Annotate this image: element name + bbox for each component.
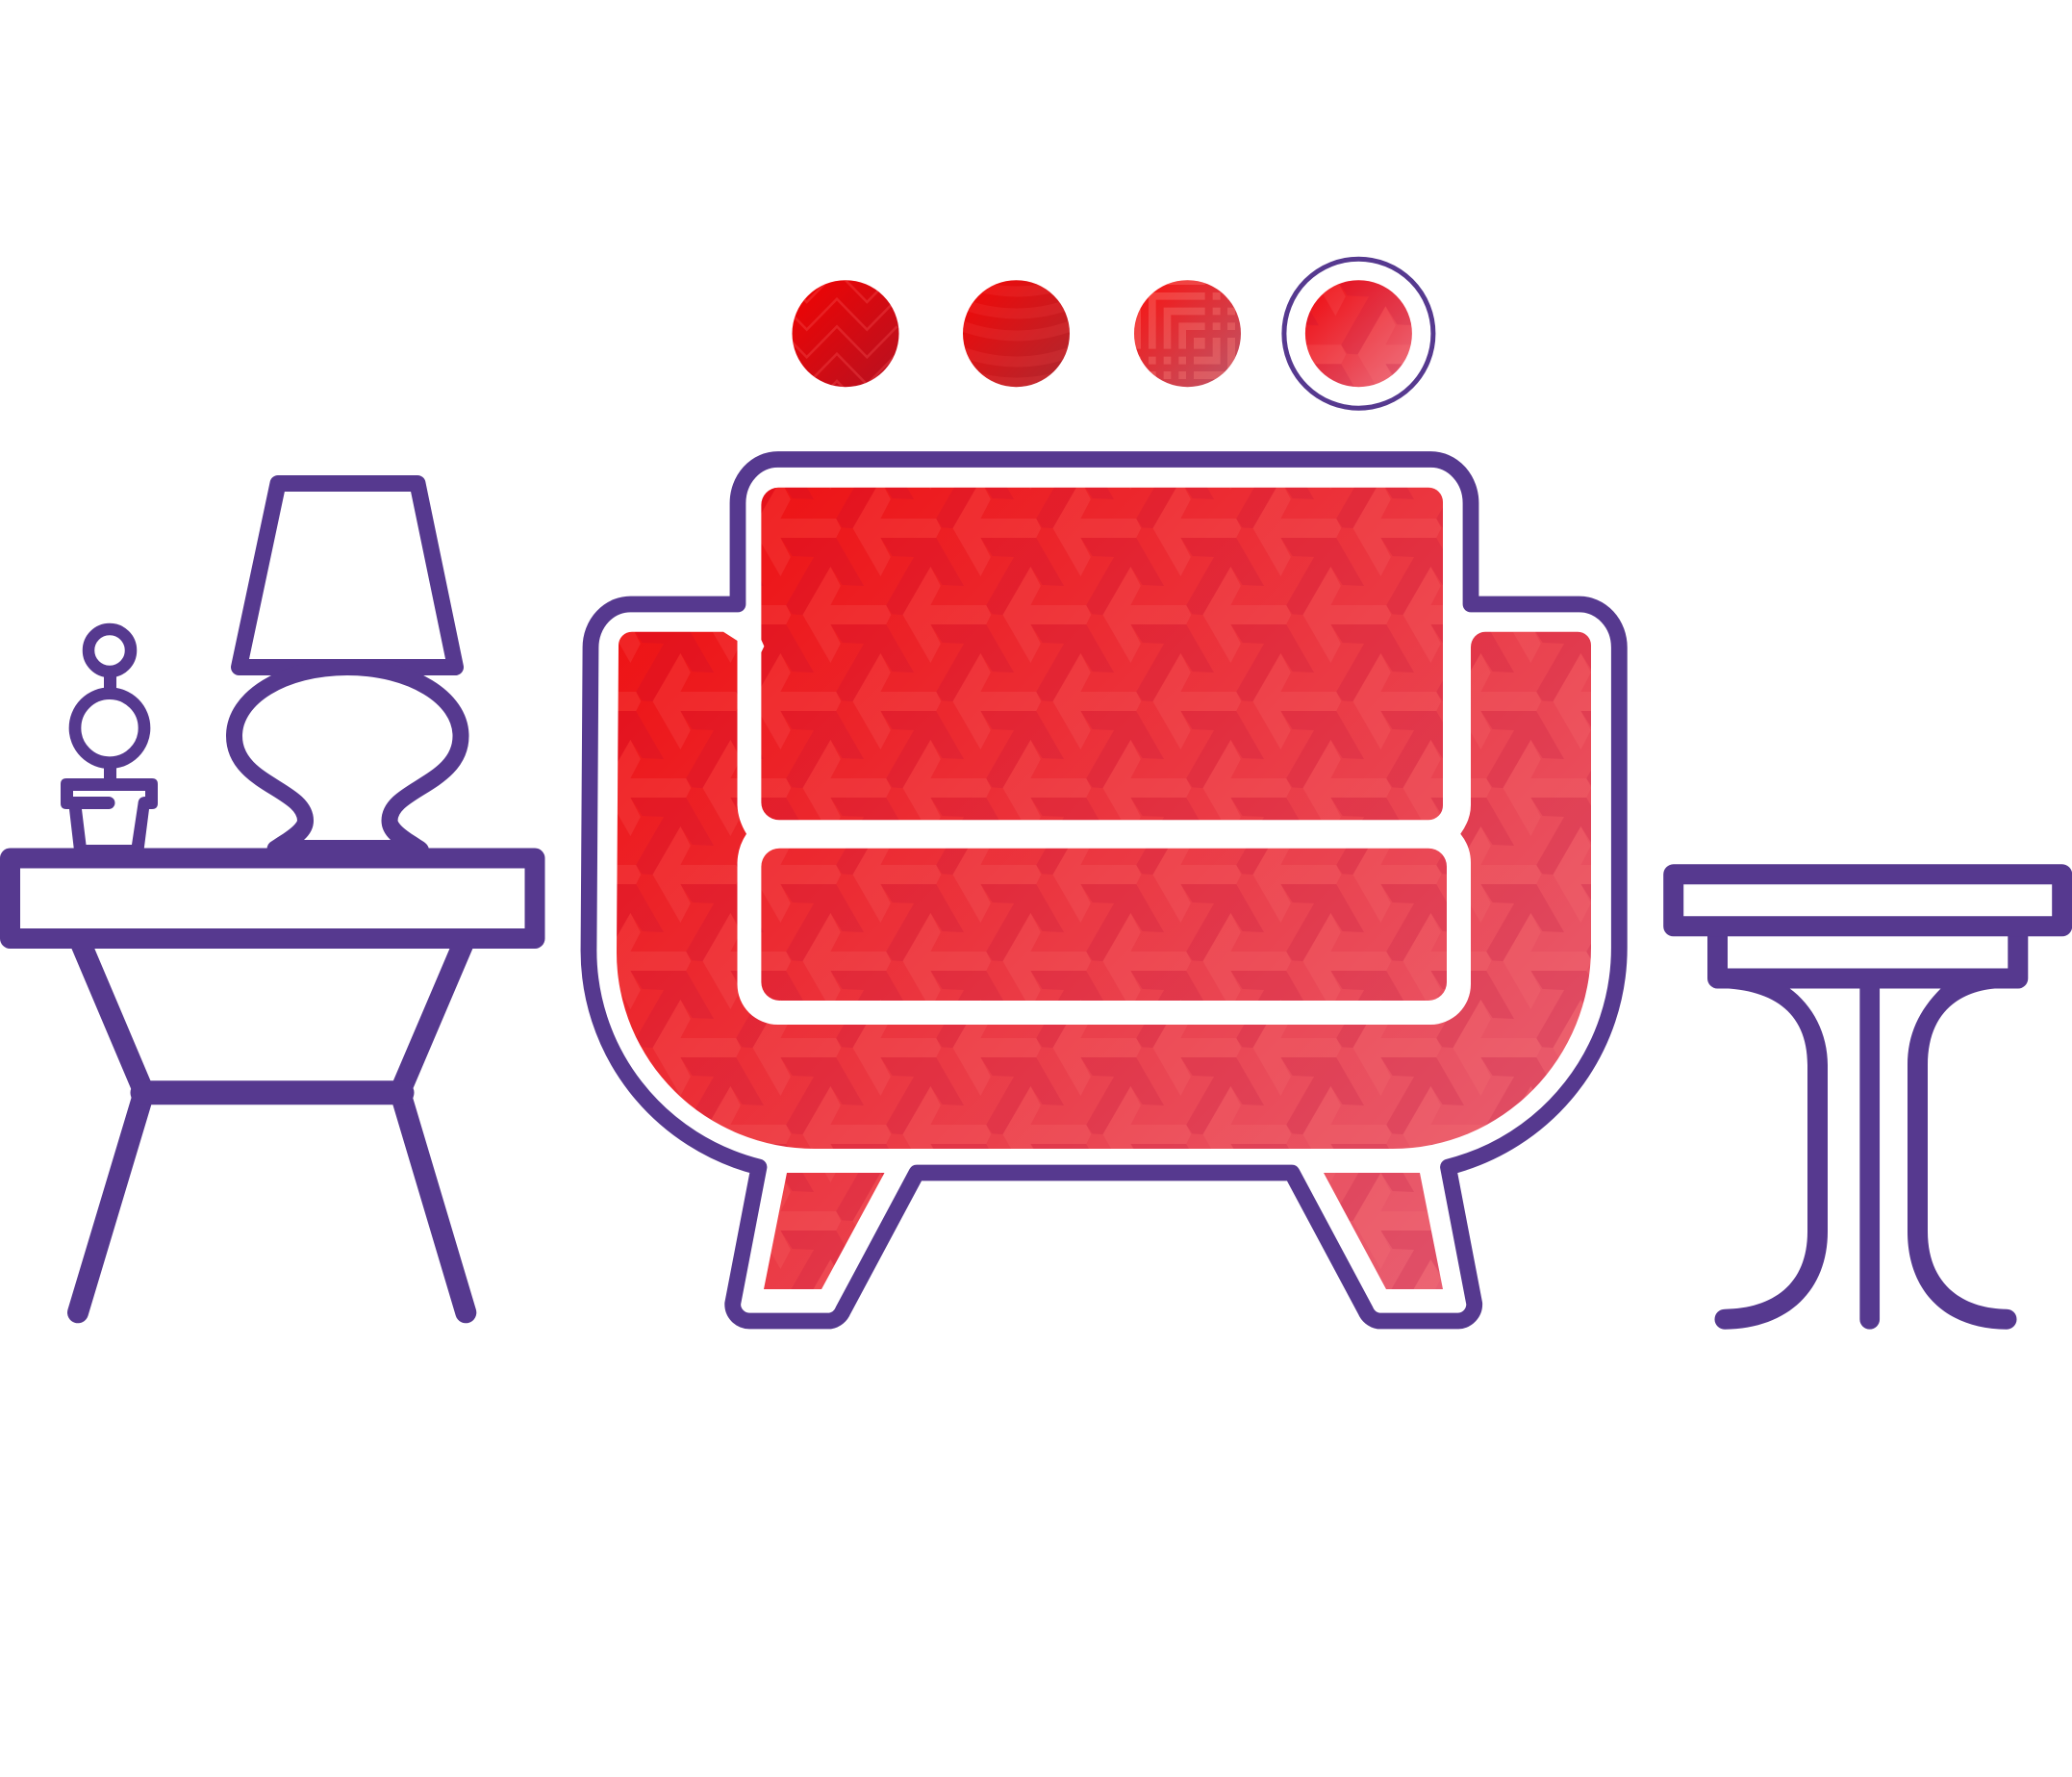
plant on left table <box>61 629 158 850</box>
right table lower apron <box>1718 926 2018 978</box>
illustration: living room furniture <box>0 256 2072 1330</box>
right table right leg <box>1908 981 2016 1330</box>
right table centre stem <box>1859 981 1880 1319</box>
plant stem lower <box>104 760 116 781</box>
swatch: red geometric maze fabric <box>1133 277 1241 387</box>
armchair back cushion <box>761 488 1443 820</box>
right table top <box>1674 875 2062 927</box>
armchair outline <box>589 460 1619 1321</box>
armchair right leg fill <box>1324 1173 1443 1289</box>
lamp shade <box>239 483 456 668</box>
plant top ball <box>88 629 131 672</box>
armchair seat cushion <box>761 849 1447 1001</box>
swatch: red wave fabric <box>957 280 1075 387</box>
table lamp <box>235 483 461 850</box>
armchair <box>589 460 1619 1321</box>
plant lower ball <box>75 694 144 763</box>
table legs and frame <box>78 941 466 1312</box>
table top <box>10 858 535 939</box>
armchair body and arms <box>617 632 1591 1149</box>
lamp foot <box>266 821 429 850</box>
swatch: red chevron fabric <box>793 280 898 387</box>
plant stem upper <box>104 672 116 695</box>
plant pot <box>61 778 158 850</box>
side table: right <box>1674 875 2062 1330</box>
swatch: selected red hex fabric with ring <box>1284 259 1433 408</box>
side table: left <box>10 858 535 1312</box>
right table left leg <box>1714 981 1828 1330</box>
lamp base body <box>235 668 461 821</box>
armchair left leg fill <box>764 1173 885 1289</box>
